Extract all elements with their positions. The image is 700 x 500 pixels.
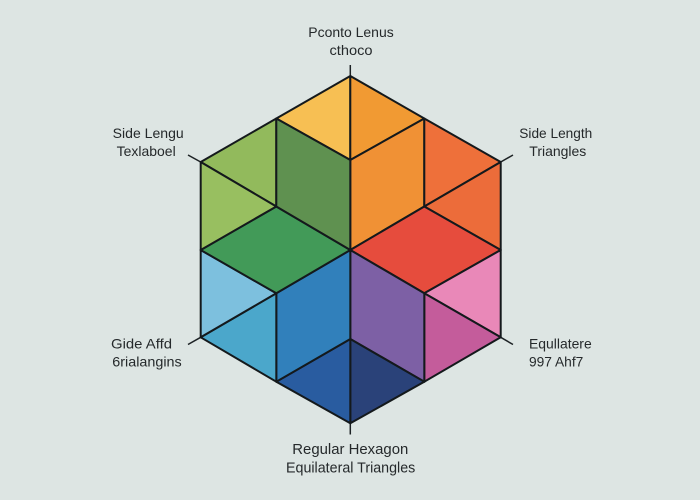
label: top: cthoco (330, 42, 373, 58)
label: lower left: Gide Affd (111, 336, 172, 352)
face: dark blue triangle (276, 339, 350, 423)
face: green rhombus (201, 206, 350, 293)
face: navy triangle (350, 339, 424, 423)
face: pink triangle (424, 250, 501, 337)
label: upper left: Side Lengu (113, 125, 184, 141)
label: lower right: 997 Ahf7 (529, 354, 584, 370)
label: upper right (519, 125, 592, 159)
label: top: Pconto Lenus (308, 24, 394, 40)
face: orange rhombus (350, 118, 424, 250)
hexagon tick marks (188, 65, 513, 434)
label: upper right: Triangles (529, 143, 586, 159)
label: top (308, 24, 394, 58)
label: bottom (286, 442, 415, 477)
face: lower orange-red triangle (424, 162, 501, 250)
face: blue rhombus (276, 250, 350, 382)
face: upper light green triangle (201, 118, 276, 206)
face: yellow triangle (276, 76, 350, 160)
face: teal triangle (201, 293, 276, 382)
label: upper left: Texlaboel (117, 143, 176, 159)
face: upper orange-red triangle (424, 118, 501, 206)
face: lower light green triangle (201, 162, 276, 250)
label: lower left (111, 336, 182, 370)
face: light orange triangle (350, 76, 424, 160)
hexagon: coloured faces (201, 76, 501, 423)
face: light blue triangle (201, 250, 276, 337)
label: lower right: Equllatere (529, 336, 592, 352)
face: magenta triangle (424, 293, 501, 382)
label: upper left (113, 125, 184, 159)
label: bottom: Equilateral Triangles (286, 461, 415, 477)
face: purple rhombus (350, 250, 424, 382)
face: red rhombus (350, 206, 501, 293)
label: upper right: Side Length (519, 125, 592, 141)
face: dark green rhombus (276, 118, 350, 250)
label: lower left: 6rialangins (112, 354, 182, 370)
label: bottom: Regular Hexagon (292, 442, 408, 458)
label: lower right (529, 336, 592, 370)
